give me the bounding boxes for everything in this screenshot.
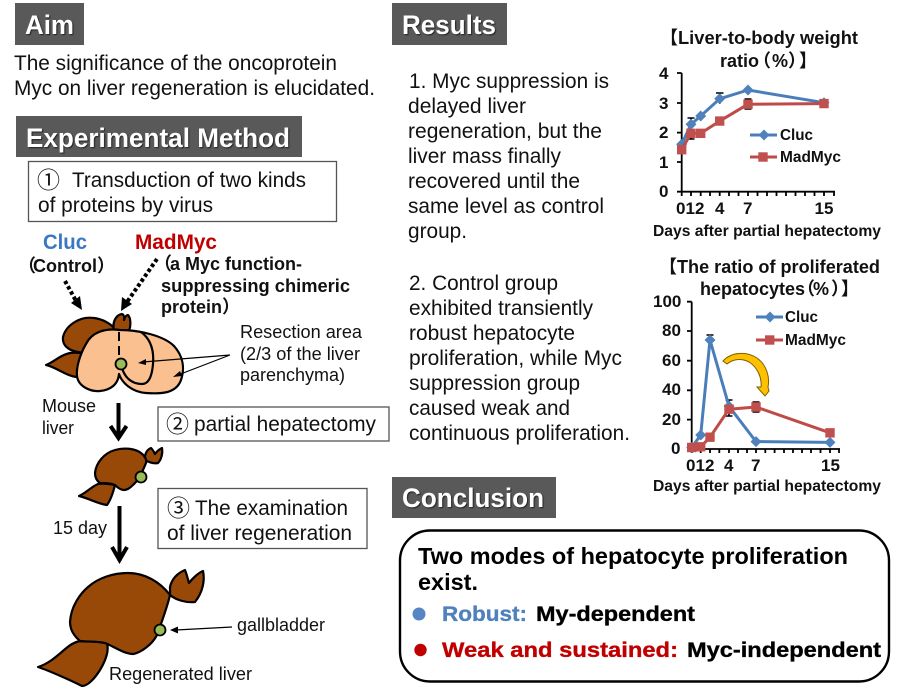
heading: Aim: Aim <box>25 10 74 40</box>
x axis labels: 7 <box>751 456 760 475</box>
text block: result 2: proliferation, while Myc <box>409 347 622 370</box>
chart title: % <box>813 279 829 299</box>
x axis labels <box>686 456 840 475</box>
arrow: down to regenerated liver <box>112 506 127 561</box>
step 1 box: of proteins by virus <box>38 194 213 217</box>
x axis labels: 1 <box>696 456 705 475</box>
chart title: 】 <box>799 51 817 71</box>
text: 15 day: 15 day <box>53 518 107 538</box>
series: Cluc <box>676 84 830 150</box>
x axis labels: 7 <box>743 199 752 218</box>
label: Cluc control: Cluc <box>43 231 87 254</box>
text block: result 2: caused weak and <box>409 397 570 420</box>
panel: conclusion <box>400 530 889 682</box>
text: mouse liver <box>42 396 96 438</box>
text block: aim statement <box>14 52 375 100</box>
step 3 box: The examination <box>195 497 348 520</box>
heading: Conclusion <box>392 477 556 518</box>
step 1 box: ① <box>37 167 60 193</box>
step 3 box <box>158 488 367 548</box>
chart title: The ratio of proliferated <box>677 257 880 277</box>
legend: MadMyc <box>785 332 846 349</box>
icon: curved yellow arrow <box>723 353 769 396</box>
chart title: 】 <box>841 279 859 299</box>
y axis labels: 0 <box>671 439 680 458</box>
label: Cluc control: （Control） <box>18 256 115 276</box>
arrow: Cluc dotted arrow <box>65 281 82 310</box>
step 1 box: Transduction of two kinds <box>72 169 306 192</box>
legend: Cluc <box>785 309 818 326</box>
arrow: MadMyc dotted arrow <box>121 259 157 311</box>
y axis labels: 1 <box>659 153 668 172</box>
legend <box>756 309 846 349</box>
legend: Cluc <box>780 127 813 144</box>
label: gallbladder with arrow: gallbladder <box>237 615 325 635</box>
step 2 box <box>158 407 389 441</box>
axes <box>677 73 835 196</box>
x axis labels: 2 <box>705 456 714 475</box>
series: Cluc <box>686 334 836 453</box>
heading: Aim <box>15 3 84 45</box>
step 2 box: ② <box>166 411 189 437</box>
x axis labels: 1 <box>686 199 695 218</box>
text block: result 1 <box>408 70 609 243</box>
bullet: weak and sustained <box>414 639 881 662</box>
label: Cluc control <box>18 231 115 276</box>
chart title: Liver-to-body weight <box>678 28 858 48</box>
chart title: hepatocytes <box>700 279 805 299</box>
chart: ratio of proliferated hepatocytes <box>653 257 881 495</box>
conclusion statement: Two modes of hepatocyte proliferation <box>418 543 848 569</box>
x axis title: Days after partial hepatectomy <box>653 223 881 240</box>
conclusion statement: exist. <box>418 569 478 595</box>
error bars <box>688 93 752 139</box>
bullet: weak and sustained: Weak and sustained: <box>442 639 678 662</box>
icon: liver after hepatectomy <box>79 448 162 505</box>
x axis labels: 4 <box>724 456 734 475</box>
text block: result 1: regeneration, but the <box>408 120 602 143</box>
y axis labels: 20 <box>662 410 681 429</box>
text block: result 2: suppression group <box>409 372 580 395</box>
label: MadMyc: protein） <box>161 297 240 317</box>
text: mouse liver: liver <box>42 418 74 438</box>
arrow: down to step 2 liver <box>110 403 126 438</box>
legend <box>750 127 841 166</box>
chart title <box>659 257 880 299</box>
x axis labels: 15 <box>821 456 840 475</box>
icon: regenerated liver <box>38 570 204 686</box>
legend: MadMyc <box>780 149 841 166</box>
heading: Results: Results <box>402 10 496 40</box>
y axis labels: 60 <box>662 351 681 370</box>
text block: result 1: same level as control <box>408 195 604 218</box>
axes <box>687 302 840 453</box>
text and arrows: resection area: parenchyma) <box>240 365 345 385</box>
label: MadMyc: suppressing chimeric <box>161 276 350 296</box>
heading: Conclusion: Conclusion <box>402 483 544 513</box>
y axis labels: 2 <box>659 123 668 142</box>
y axis labels: 40 <box>662 380 681 399</box>
series: MadMyc <box>677 99 829 154</box>
y axis labels <box>659 64 669 201</box>
heading: Results <box>392 3 507 45</box>
chart title: ratio <box>720 51 759 71</box>
step 1 box <box>28 162 336 222</box>
chart title: （ <box>753 51 771 71</box>
x axis labels: 4 <box>715 199 725 218</box>
text block: result 2: exhibited transiently <box>409 297 593 320</box>
text block: result 2 <box>409 272 630 445</box>
chart title: 【 <box>660 28 678 48</box>
text: regenerated liver: Regenerated liver <box>109 664 252 684</box>
conclusion statement <box>418 543 848 595</box>
text block: aim statement: The significance of the oncoprotein <box>14 52 337 75</box>
text: mouse liver: Mouse <box>42 396 96 416</box>
chart title: % <box>772 51 788 71</box>
bullet: robust: Robust: <box>442 603 527 626</box>
text block: result 2: robust hepatocyte <box>409 322 575 345</box>
label: MadMyc <box>135 231 350 317</box>
chart: liver-to-body weight ratio <box>653 28 881 240</box>
icon: mouse liver before resection <box>46 314 183 393</box>
text block: result 1: group. <box>408 220 467 243</box>
y axis labels: 3 <box>659 94 668 113</box>
text block: result 2: continuous proliferation. <box>409 422 630 445</box>
y axis labels: 4 <box>659 64 669 83</box>
heading: Experimental Method <box>16 116 302 157</box>
text block: result 1: 1. Myc suppression is <box>409 70 609 93</box>
x axis title: Days after partial hepatectomy <box>653 478 881 495</box>
bullet: weak and sustained: Myc-independent <box>687 639 881 662</box>
step 3 box: of liver regeneration <box>167 522 352 545</box>
x axis labels: 2 <box>695 199 704 218</box>
y axis labels <box>653 292 681 458</box>
text block: aim statement: Myc on liver regeneration is elucidated. <box>14 77 375 100</box>
chart title: 【 <box>659 257 677 277</box>
x axis labels <box>676 199 833 218</box>
label: MadMyc: MadMyc <box>135 231 217 254</box>
heading: Experimental Method: Experimental Method <box>26 123 290 153</box>
y axis labels: 80 <box>662 321 681 340</box>
text block: result 1: liver mass finally <box>408 145 561 168</box>
label: MadMyc: （a Myc function- <box>154 254 302 274</box>
chart title: （ <box>797 279 815 299</box>
error bars <box>706 335 760 416</box>
x axis labels: 0 <box>676 199 685 218</box>
text block: result 1: recovered until the <box>408 170 580 193</box>
text and arrows: resection area <box>138 322 363 385</box>
label: gallbladder with arrow <box>170 615 325 635</box>
bullet: robust <box>412 603 695 626</box>
y axis labels: 0 <box>659 182 668 201</box>
x axis labels: 15 <box>814 199 833 218</box>
text block: result 1: delayed liver <box>408 95 526 118</box>
step 2 box: partial hepatectomy <box>194 413 376 436</box>
series: MadMyc <box>687 402 835 452</box>
bullet: robust: My-dependent <box>536 603 695 626</box>
text block: result 2: 2. Control group <box>409 272 558 295</box>
text and arrows: resection area: (2/3 of the liver <box>240 344 360 364</box>
chart title: ） <box>831 279 849 299</box>
chart title <box>660 28 858 71</box>
chart title: ） <box>788 51 806 71</box>
text and arrows: resection area: Resection area <box>240 322 363 342</box>
y axis labels: 100 <box>653 292 681 311</box>
x axis labels: 0 <box>686 456 695 475</box>
step 3 box: ③ <box>167 495 190 521</box>
